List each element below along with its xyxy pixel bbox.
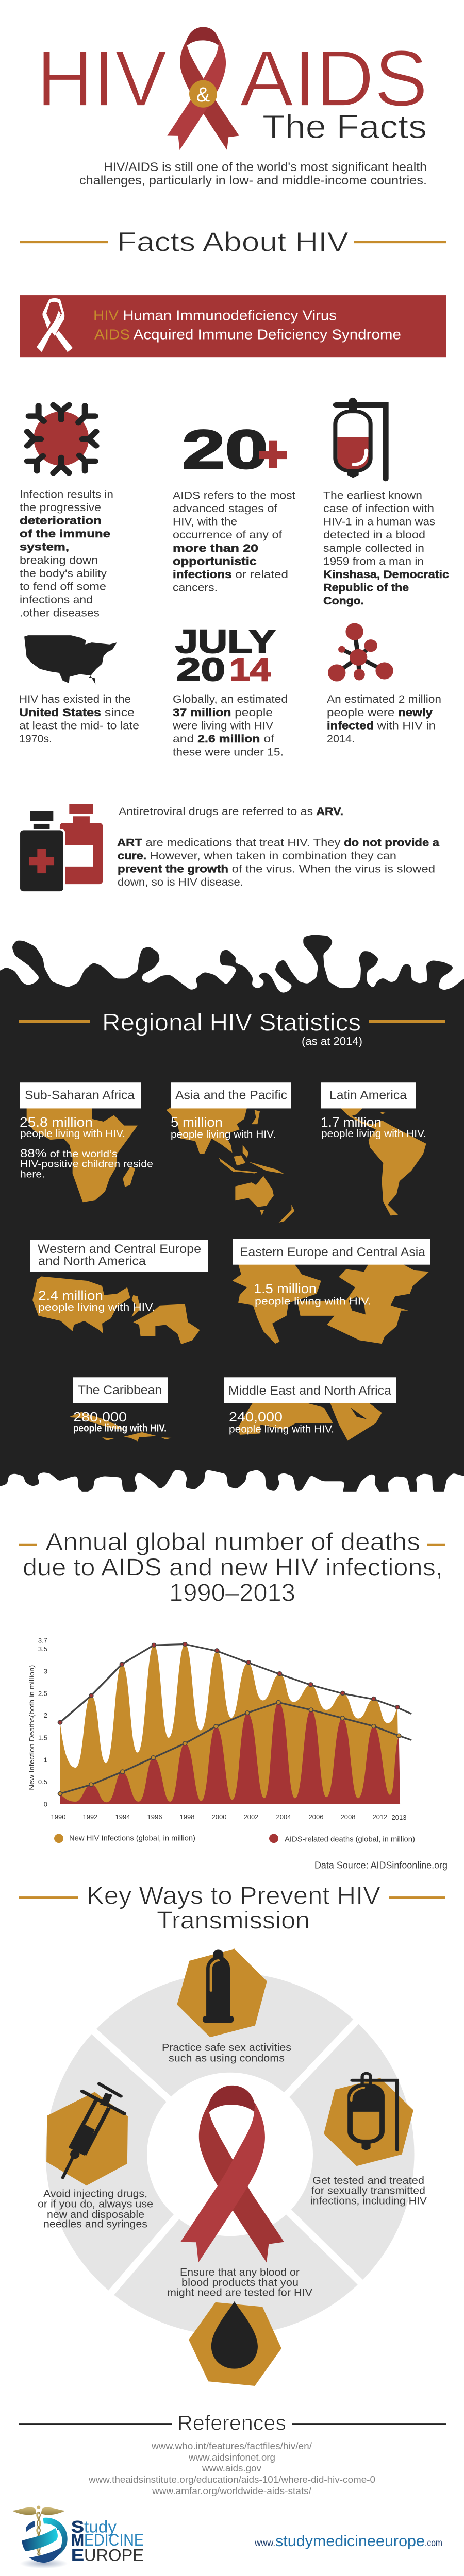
logo mark: caduceus and globe: [12, 2505, 68, 2569]
text: earliest known case: Kinshasa, Democratic: [323, 568, 449, 581]
x axis years: 1990: [51, 1813, 65, 1821]
logo wordmark: [71, 2517, 144, 2564]
text: safe sex: [162, 2042, 291, 2064]
icon: white ribbon: [37, 298, 73, 352]
icon: condom hexagon: [177, 1948, 267, 2037]
icon: July 2014: JULY: [175, 623, 276, 660]
icon: medicine bottles: [19, 804, 103, 892]
text: newly infected: [327, 693, 441, 745]
x axis years: 1996: [147, 1813, 162, 1821]
reference list: www.aids.gov: [202, 2463, 262, 2473]
panel: Sub-Saharan Africa stats: 88% of the world’s: [20, 1146, 118, 1160]
text: ART explanation: ART are medications that treat HIV. They do not provide a: [117, 836, 440, 849]
text: immune system: of the immune: [20, 528, 110, 540]
text: immune system: system,: [20, 541, 69, 553]
x axis years: 1992: [83, 1813, 97, 1821]
panel: Eastern Europe and Central Asia stats: Eastern Europe and Central Asia: [240, 1245, 426, 1259]
x axis years: 2004: [276, 1813, 291, 1821]
logo wordmark: EDICINE: [84, 2530, 144, 2549]
x axis years: 2002: [244, 1813, 258, 1821]
panel: Eastern Europe and Central Asia stats: people living with HIV.: [255, 1296, 371, 1307]
heading: annual global deaths and infections: 1990–2013: [169, 1579, 295, 1606]
logo: Study Medicine Europe: [12, 2505, 144, 2569]
text: earliest known case: 1959 from a man in: [323, 555, 424, 567]
text: safe sex: Practice safe sex activities: [162, 2042, 291, 2054]
text: blood products: blood products that you: [181, 2277, 299, 2289]
text: safe sex: such as using condoms: [169, 2053, 285, 2064]
panel: Western and Central Europe and North America stats: [30, 1240, 208, 1313]
text: AIDS stages: occurrence of any of: [173, 529, 282, 541]
icon: IV bag hexagon: [324, 2073, 413, 2166]
text: newly infected: infected with HIV in: [327, 720, 436, 732]
panel: Middle East and North Africa stats: Middle East and North Africa: [228, 1384, 392, 1398]
panel: Asia and the Pacific stats: [171, 1082, 291, 1141]
text: get tested: [310, 2175, 427, 2207]
heading: Regional HIV Statistics: Regional HIV Statistics: [102, 1009, 361, 1036]
map: Latin America: [340, 1107, 426, 1215]
text: global estimate: [172, 693, 288, 758]
title: HIV & AIDS: AIDS: [240, 34, 428, 123]
text: United States: [19, 693, 139, 745]
y axis values: 3: [44, 1667, 47, 1675]
map: Western Europe and North America: [32, 1276, 200, 1344]
text: ART explanation: down, so is HIV disease.: [118, 875, 243, 888]
x axis years: 2013: [392, 1814, 406, 1821]
y axis values: 0: [44, 1800, 47, 1808]
map: Middle East and North Africa: [238, 1402, 382, 1440]
panel: regional statistics dark splash background: [0, 935, 464, 1515]
panel: The Caribbean stats: [73, 1377, 168, 1434]
text: earliest known case: HIV-1 in a human was: [323, 516, 435, 528]
panel: definitions banner: [20, 295, 446, 357]
panel: The Caribbean stats: 280,000: [73, 1410, 127, 1425]
panel: Middle East and North Africa stats: [224, 1377, 396, 1435]
text: earliest known case: sample collected in: [323, 542, 424, 554]
icon: 20+: 20: [182, 419, 268, 480]
reference list: [88, 2441, 375, 2496]
text: immune system: the progressive: [20, 501, 101, 514]
logo wordmark: S: [71, 2517, 84, 2536]
logo wordmark: UROPE: [84, 2546, 144, 2564]
y axis values: 0.5: [38, 1778, 47, 1786]
x axis years: 2000: [212, 1813, 226, 1821]
icon: 20+: [182, 419, 287, 480]
text: newly infected: people were newly: [327, 706, 433, 719]
panel: Eastern Europe and Central Asia stats: [233, 1239, 430, 1307]
text: United States: at least the mid- to late: [19, 720, 139, 732]
y axis title: New Infection Deaths(both in million): [28, 1665, 36, 1790]
panel: Middle East and North Africa stats: people living with HIV.: [229, 1424, 334, 1435]
intro paragraph: [79, 160, 427, 188]
y axis values: 2: [44, 1711, 47, 1719]
text: immune system: .other diseases: [20, 607, 100, 619]
panel: Latin America stats: 1.7 million: [321, 1115, 382, 1130]
text: blood products: Ensure that any blood or: [180, 2266, 300, 2278]
chart: new HIV infections and AIDS deaths: [28, 1636, 415, 1844]
panel: Western and Central Europe and North America stats: Western and Central Europe: [38, 1242, 201, 1256]
x axis years: [51, 1813, 406, 1821]
text: avoid injecting: needles and syringes: [43, 2218, 147, 2230]
heading: annual global deaths and infections: Annual global number of deaths: [45, 1528, 420, 1556]
heading: annual global deaths and infections: [19, 1528, 445, 1606]
text: immune system: the body's ability: [20, 567, 107, 580]
icon: virus with antibodies: [27, 405, 96, 473]
text: earliest known case: Republic of the: [323, 582, 409, 594]
y axis values: 3.7: [38, 1636, 47, 1644]
panel: Western and Central Europe and North America stats: and North America: [38, 1255, 146, 1268]
panel: Asia and the Pacific stats: 5 million: [171, 1115, 223, 1130]
intro paragraph: challenges, particularly in low- and middle-income countries.: [79, 174, 427, 188]
intro paragraph: HIV/AIDS is still one of the world's most significant health: [104, 160, 427, 174]
text: avoid injecting: or if you do, always use: [38, 2198, 153, 2210]
icon: spreading virus network: [328, 623, 393, 682]
panel: Sub-Saharan Africa stats: [20, 1082, 153, 1180]
title: HIV & AIDS: HIV: [37, 34, 167, 123]
text: AIDS stages: infections or related: [173, 568, 288, 581]
text: newly infected: 2014.: [327, 733, 355, 745]
legend: new HIV infections: New HIV Infections (global, in million): [69, 1834, 195, 1842]
website address: studymedicineeurope: [275, 2533, 425, 2550]
map: The Caribbean: [69, 1412, 172, 1441]
icon: syringe hexagon: [46, 2084, 128, 2185]
text: blood products: might need are tested for HIV: [167, 2287, 312, 2298]
text: blood products: [167, 2266, 312, 2298]
website address: www.: [254, 2537, 275, 2549]
reference list: www.aidsinfonet.org: [188, 2452, 275, 2463]
text: immune system: [20, 488, 113, 619]
heading: References: References: [177, 2411, 286, 2434]
definition: HIV: HIV Human Immunodeficiency Virus: [93, 308, 337, 323]
x axis years: 1998: [180, 1813, 194, 1821]
diagram: prevention wheel: [38, 1948, 427, 2386]
text: immune system: Infection results in: [20, 488, 113, 500]
text: United States: United States since: [19, 706, 135, 719]
text: immune system: infections and: [20, 594, 93, 606]
icon: central red ribbon: [180, 2086, 284, 2262]
text: AIDS stages: HIV, with the: [173, 516, 237, 528]
text: global estimate: these were under 15.: [173, 746, 284, 758]
text: AIDS stages: cancers.: [173, 582, 218, 594]
text: global estimate: 37 million people: [173, 706, 273, 719]
definition: AIDS: AIDS Acquired Immune Deficiency Syndrome: [94, 327, 401, 343]
text: global estimate: were living with HIV: [172, 720, 274, 732]
icon: blood drop hexagon: [189, 2301, 281, 2386]
x axis years: 1994: [115, 1813, 130, 1821]
website address: .com: [425, 2537, 442, 2549]
panel: Asia and the Pacific stats: Asia and the Pacific: [175, 1089, 287, 1103]
title: HIV & AIDS: [37, 34, 428, 123]
icon: United States map: [24, 635, 117, 685]
heading: Key Ways to Prevent HIV Transmission: [19, 1882, 445, 1935]
heading: Facts About HIV: Facts About HIV: [117, 227, 349, 257]
x axis years: 2012: [373, 1813, 387, 1821]
text: AIDS stages: more than 20: [173, 542, 258, 554]
y axis values: [38, 1636, 47, 1808]
text: AIDS stages: AIDS refers to the most: [173, 489, 295, 501]
x axis years: 2008: [341, 1813, 355, 1821]
text: earliest known case: [323, 489, 449, 607]
panel: Latin America stats: [321, 1082, 426, 1140]
heading: Regional HIV Statistics: [19, 1009, 445, 1047]
logo wordmark: M: [71, 2530, 84, 2549]
text: avoid injecting: [38, 2188, 153, 2230]
panel: Sub-Saharan Africa stats: people living with HIV.: [20, 1128, 125, 1140]
panel: The Caribbean stats: people living with HIV.: [73, 1423, 167, 1434]
text: earliest known case: detected in a blood: [323, 529, 425, 541]
data source: Data Source: AIDSinfoonline.org: [314, 1860, 448, 1870]
heading: Facts About HIV: [20, 227, 446, 257]
panel: Asia and the Pacific stats: people living with HIV.: [171, 1129, 276, 1141]
panel: Latin America stats: Latin America: [329, 1089, 407, 1103]
heading: Key Ways to Prevent HIV Transmission: Key Ways to Prevent HIV: [87, 1882, 381, 1909]
text: earliest known case: case of infection with: [323, 502, 434, 515]
icon: July 2014: [175, 623, 276, 688]
text: get tested: infections, including HIV: [310, 2195, 427, 2207]
legend: AIDS-related deaths: AIDS-related deaths (global, in million): [285, 1836, 415, 1844]
text: immune system: to fend off some: [20, 581, 106, 592]
text: United States: HIV has existed in the: [19, 693, 131, 705]
note: as at 2014: (as at 2014): [302, 1035, 362, 1047]
text: immune system: breaking down: [20, 554, 98, 566]
text: ART explanation: prevent the growth of the virus. When the virus is slowed: [118, 862, 435, 875]
text: ART explanation: [117, 836, 440, 888]
subtitle: The Facts: The Facts: [262, 108, 427, 145]
panel: Sub-Saharan Africa stats: here.: [20, 1168, 45, 1180]
logo wordmark: E: [71, 2546, 84, 2564]
text: ART explanation: cure. However, when taken in combination they can: [118, 849, 396, 862]
panel: Western and Central Europe and North America stats: 2.4 million: [38, 1289, 103, 1303]
text: global estimate: and 2.6 million of: [173, 733, 274, 745]
text: immune system: deterioration: [20, 515, 102, 527]
map: Eastern Europe and Central Asia: [233, 1264, 429, 1344]
text: AIDS stages: [173, 489, 295, 594]
text: AIDS stages: opportunistic: [173, 555, 257, 567]
panel: Sub-Saharan Africa stats: 25.8 million: [20, 1115, 93, 1130]
text: AIDS stages: advanced stages of: [173, 502, 277, 515]
reference list: www.who.int/features/factfiles/hiv/en/: [151, 2441, 312, 2451]
reference list: www.amfar.org/worldwide-aids-stats/: [152, 2485, 312, 2496]
icon: red ribbon with ampersand: &: [196, 83, 210, 106]
panel: Latin America stats: people living with HIV.: [321, 1128, 426, 1140]
text: global estimate: Globally, an estimated: [173, 693, 288, 705]
icon: July 2014: 14: [229, 652, 271, 688]
panel: The Caribbean stats: The Caribbean: [78, 1383, 162, 1397]
reference list: www.theaidsinstitute.org/education/aids-101/where-did-hiv-come-0: [88, 2474, 375, 2485]
y axis values: 2.5: [38, 1690, 47, 1698]
text: get tested: Get tested and treated: [312, 2175, 424, 2187]
panel: Middle East and North Africa stats: 240,000: [229, 1410, 283, 1425]
map: Asia and the Pacific: [167, 1107, 294, 1223]
text: United States: 1970s.: [19, 733, 52, 745]
map: Sub-Saharan Africa: [27, 1107, 138, 1202]
text: earliest known case: The earliest known: [323, 489, 422, 501]
text: avoid injecting: new and disposable: [47, 2209, 144, 2221]
logo wordmark: tudy: [84, 2517, 117, 2536]
x axis years: 2006: [309, 1813, 323, 1821]
panel: Western and Central Europe and North America stats: people living with HIV.: [38, 1302, 155, 1313]
text: ARV definition: Antiretroviral drugs are referred to as ARV.: [119, 805, 343, 818]
heading: annual global deaths and infections: due to AIDS and new HIV infections,: [23, 1554, 443, 1581]
text: avoid injecting: Avoid injecting drugs,: [43, 2188, 147, 2199]
y axis values: 1.5: [38, 1734, 47, 1741]
y axis values: 1: [44, 1756, 47, 1764]
icon: blood bag: [335, 398, 386, 479]
panel: Eastern Europe and Central Asia stats: 1.5 million: [254, 1282, 317, 1296]
y axis values: 3.5: [38, 1645, 47, 1653]
panel: Sub-Saharan Africa stats: HIV-positive children reside: [20, 1159, 153, 1170]
text: get tested: for sexually transmitted: [311, 2185, 425, 2197]
icon: July 2014: 20: [176, 652, 225, 688]
heading: Key Ways to Prevent HIV Transmission: Transmission: [157, 1907, 310, 1935]
icon: red ribbon with ampersand: [167, 27, 239, 150]
panel: Sub-Saharan Africa stats: Sub-Saharan Africa: [25, 1089, 135, 1103]
text: earliest known case: Congo.: [323, 595, 364, 607]
text: newly infected: An estimated 2 million: [327, 693, 441, 705]
